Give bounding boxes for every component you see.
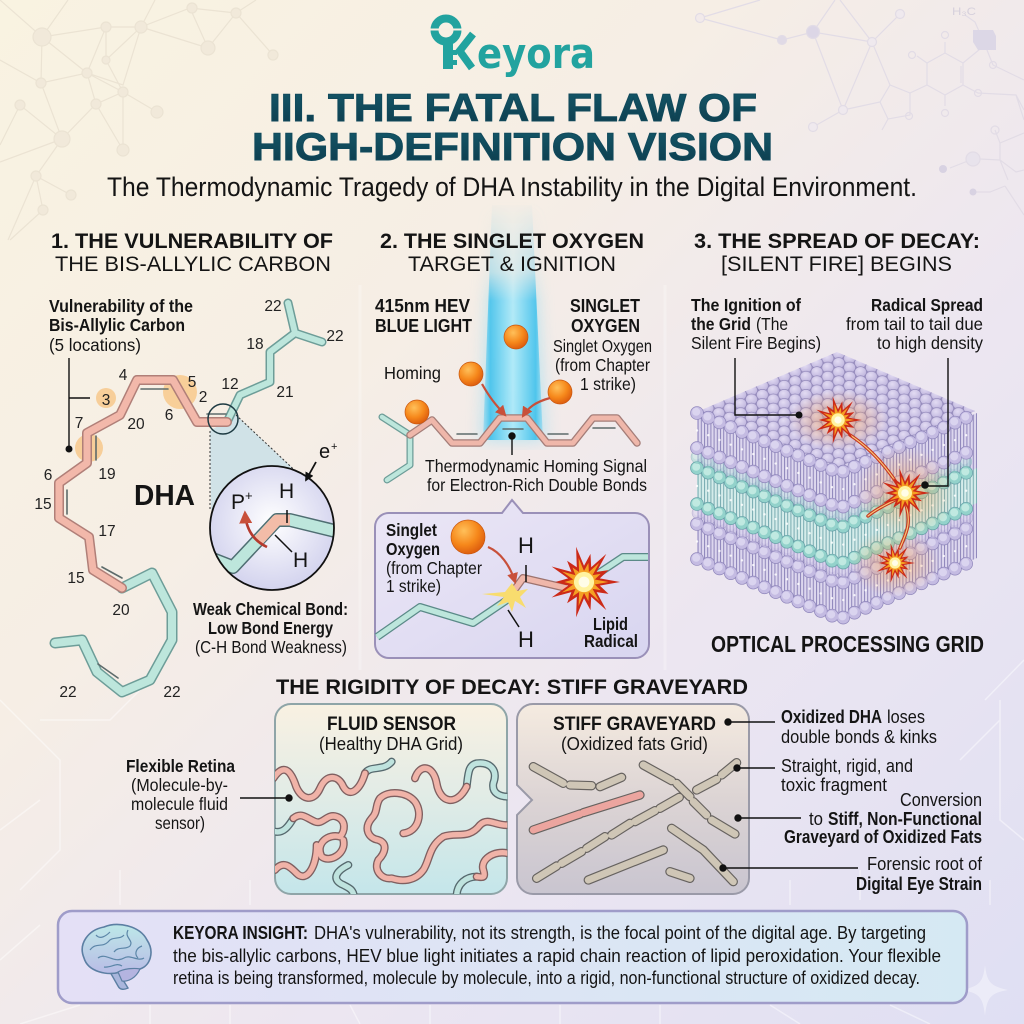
radical spread label xyxy=(846,295,983,353)
magnified bond lens: P xyxy=(231,491,245,514)
inset: lipid radical: 1 strike) xyxy=(386,576,441,596)
inset: lipid radical xyxy=(375,500,649,658)
panel: stiff graveyard: STIFF GRAVEYARD xyxy=(553,714,716,735)
panel: singlet oxygen xyxy=(375,295,652,658)
carbon numbers: 19 xyxy=(98,466,116,483)
inset: lipid radical: Radical xyxy=(584,631,638,651)
title: III. THE FATAL FLAW OF xyxy=(269,87,757,130)
carbon numbers xyxy=(34,298,344,701)
inset: lipid radical: H xyxy=(518,627,534,652)
inset: lipid radical: (from Chapter xyxy=(386,558,482,578)
carbon numbers: 7 xyxy=(75,415,83,432)
section title: rigidity: THE RIGIDITY OF DECAY: STIFF GRAVEYARD xyxy=(276,676,748,699)
section heading 2: 2. THE SINGLET OXYGEN xyxy=(380,230,644,253)
background network: top left xyxy=(0,0,278,240)
insight text xyxy=(173,923,941,988)
flexible retina callout xyxy=(240,794,293,802)
insight text: the bis-allylic carbons, HEV blue light initiates a rapid chain reaction of lipid peroxidation. Your flexible xyxy=(173,946,941,966)
section heading 2 xyxy=(380,230,644,276)
inset: lipid radical: H xyxy=(518,533,534,558)
insight text: retina is being transformed, molecule by molecule, into a rigid, non-functional structure of oxidized decay. xyxy=(173,968,920,988)
insight text: DHA's vulnerability, not its strength, is the focal point of the digital age. By targeting xyxy=(314,923,926,943)
carbon numbers: 20 xyxy=(112,602,130,619)
panel: fluid sensor: FLUID SENSOR xyxy=(327,714,456,735)
magnified bond lens: + xyxy=(331,441,337,453)
beam labels xyxy=(375,295,473,336)
spreading fire trails xyxy=(850,435,908,548)
graveyard annotations: Straight, rigid, and xyxy=(781,756,913,776)
graveyard annotations: Stiff, Non-Functional xyxy=(828,809,982,829)
title: HIGH-DEFINITION VISION xyxy=(252,126,773,169)
homing signal caption: Thermodynamic Homing Signal xyxy=(425,456,647,476)
singlet oxygen labels: Singlet Oxygen xyxy=(553,336,652,356)
graveyard annotations: Forensic root of xyxy=(867,854,983,874)
logo: Keyora xyxy=(430,18,595,78)
background circuit traces xyxy=(0,285,1024,1024)
section heading 3: [SILENT FIRE] BEGINS xyxy=(721,253,952,276)
singlet oxygen labels: OXYGEN xyxy=(571,315,640,336)
magnified bond lens: H xyxy=(279,480,294,503)
beam labels: BLUE LIGHT xyxy=(375,315,473,336)
magnified bond lens: e xyxy=(319,441,330,463)
graveyard annotations: Oxidized DHA xyxy=(781,707,882,727)
section heading 1: THE BIS-ALLYLIC CARBON xyxy=(55,253,331,276)
panel: Keyora insight xyxy=(58,911,967,1003)
homing signal caption xyxy=(425,456,647,495)
subtitle: The Thermodynamic Tragedy of DHA Instability in the Digital Environment. xyxy=(107,172,917,202)
bis-allylic label: Bis-Allylic Carbon xyxy=(49,315,185,335)
section heading 3: 3. THE SPREAD OF DECAY: xyxy=(694,230,980,253)
callout line xyxy=(66,358,90,452)
homing signal caption: for Electron-Rich Double Bonds xyxy=(427,475,647,495)
inset: lipid radical: Singlet xyxy=(386,520,437,540)
bis-allylic highlights xyxy=(75,375,197,462)
flexible retina label: (Molecule-by- xyxy=(131,775,228,795)
graveyard annotations xyxy=(781,707,983,894)
carbon numbers: 18 xyxy=(246,336,264,353)
carbon numbers: 2 xyxy=(199,389,207,406)
panel: spread of decay xyxy=(691,295,984,657)
DHA carbon chain xyxy=(55,303,322,692)
weak bond caption: Weak Chemical Bond: xyxy=(193,599,348,619)
radical spread label: to high density xyxy=(877,333,983,353)
panel: DHA molecule xyxy=(34,296,348,701)
carbon numbers: 6 xyxy=(165,407,173,424)
target circle xyxy=(208,404,238,434)
zoom wedge xyxy=(210,415,305,510)
beam labels: 415nm HEV xyxy=(375,295,471,316)
singlet oxygen labels: 1 strike) xyxy=(580,374,636,394)
carbon numbers: 6 xyxy=(44,467,52,484)
carbon numbers: 15 xyxy=(34,496,52,513)
lipid membrane stack xyxy=(696,352,977,620)
ignition label: Silent Fire Begins) xyxy=(691,333,821,353)
sparkle xyxy=(962,965,1008,1016)
graveyard annotations: Digital Eye Strain xyxy=(856,874,982,894)
carbon numbers: 20 xyxy=(127,416,145,433)
flexible retina label xyxy=(126,756,235,833)
bis-allylic label: Vulnerability of the xyxy=(49,296,193,316)
ignition label: (The xyxy=(756,314,788,334)
singlet oxygen labels: SINGLET xyxy=(570,295,641,316)
ignition callout xyxy=(735,358,802,418)
carbon numbers: 12 xyxy=(221,376,239,393)
graveyard annotations: toxic fragment xyxy=(781,775,887,795)
DHA label: DHA xyxy=(134,480,195,512)
carbon numbers: 22 xyxy=(326,328,344,345)
weak bond caption: Low Bond Energy xyxy=(208,618,333,638)
ignition label: The Ignition of xyxy=(691,295,801,315)
singlet oxygen labels xyxy=(553,295,652,394)
section heading 1 xyxy=(51,230,333,276)
ignition label: the Grid xyxy=(691,314,751,334)
carbon numbers: 4 xyxy=(119,367,128,384)
homing label: Homing xyxy=(384,363,441,383)
background formula label: H₃C xyxy=(952,6,976,18)
bis-allylic label xyxy=(49,296,193,355)
title xyxy=(252,87,773,169)
bis-allylic label: (5 locations) xyxy=(49,335,141,355)
graveyard annotations: Graveyard of Oxidized Fats xyxy=(784,827,982,847)
carbon numbers: 21 xyxy=(276,384,294,401)
graveyard annotations: double bonds & kinks xyxy=(781,727,937,747)
singlet oxygen labels: (from Chapter xyxy=(555,355,650,375)
flexible retina label: Flexible Retina xyxy=(126,756,235,776)
flexible fatty acid worms xyxy=(273,762,508,897)
magnified bond lens: H xyxy=(293,549,308,572)
graveyard annotations: Conversion xyxy=(900,790,982,810)
radical spread label: from tail to tail due xyxy=(846,314,983,334)
panel: stiff graveyard xyxy=(517,704,749,894)
inset: lipid radical: Oxygen xyxy=(386,539,440,559)
homing signal marker xyxy=(509,433,515,455)
carbon numbers: 5 xyxy=(188,374,196,391)
carbon numbers: 17 xyxy=(98,523,116,540)
magnified bond lens: + xyxy=(245,488,253,503)
carbon numbers: 22 xyxy=(59,684,77,701)
panel: stiff graveyard: (Oxidized fats Grid) xyxy=(561,734,708,754)
graveyard annotations: to xyxy=(809,809,823,829)
radical spread callout xyxy=(921,358,948,489)
rigid oxidized rods xyxy=(533,763,737,882)
panel: fluid sensor: (Healthy DHA Grid) xyxy=(319,734,463,754)
weak bond caption: (C-H Bond Weakness) xyxy=(195,637,347,657)
flexible retina label: molecule fluid xyxy=(131,794,228,814)
insight text: KEYORA INSIGHT: xyxy=(173,923,308,943)
fire bursts xyxy=(816,396,930,583)
carbon numbers: 15 xyxy=(67,570,85,587)
radical spread label: Radical Spread xyxy=(871,295,983,315)
carbon numbers: 22 xyxy=(163,684,181,701)
blue light beam xyxy=(482,205,544,440)
graveyard annotations: loses xyxy=(887,707,925,727)
flexible retina label: sensor) xyxy=(155,813,205,833)
lipid chain xyxy=(382,417,637,480)
homing arrows xyxy=(482,384,550,416)
logo: Keyora: eyora xyxy=(477,29,595,78)
weak bond caption xyxy=(193,599,348,657)
section heading 3 xyxy=(694,230,980,276)
ignition label xyxy=(691,295,821,353)
carbon numbers: 22 xyxy=(264,298,282,315)
magnified bond lens xyxy=(210,441,337,590)
trail highlights xyxy=(850,435,908,548)
section heading 1: 1. THE VULNERABILITY OF xyxy=(51,230,333,253)
icon: brain xyxy=(82,925,151,989)
background molecule: top right xyxy=(696,0,1024,215)
panel: fluid sensor xyxy=(273,704,508,897)
inset: lipid radical: Lipid xyxy=(593,614,628,634)
section heading 2: TARGET & IGNITION xyxy=(408,253,616,276)
carbon numbers: 3 xyxy=(102,392,110,409)
oxygen orbs xyxy=(405,325,572,424)
graveyard callouts xyxy=(719,718,858,872)
